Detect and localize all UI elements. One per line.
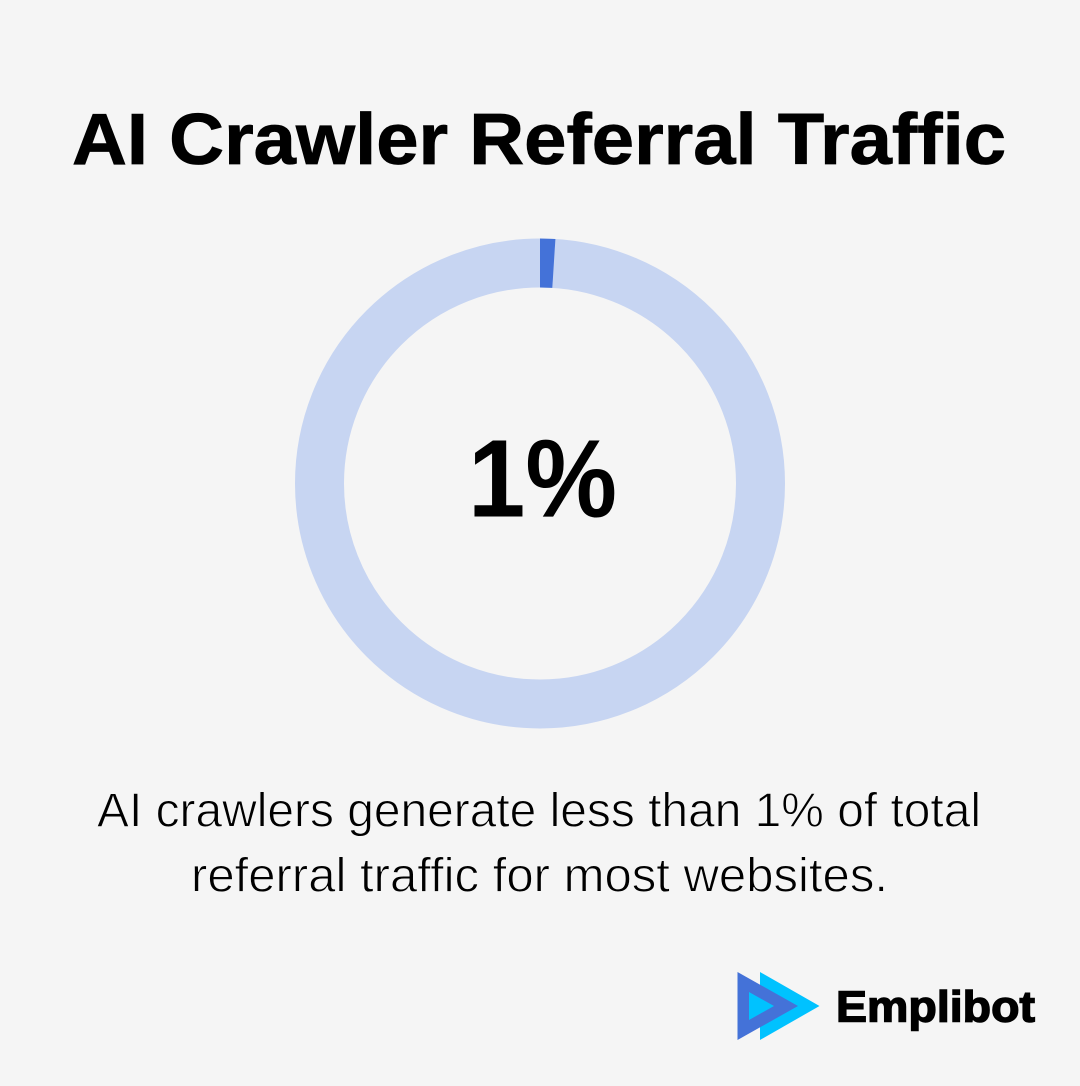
logo: Emplibot — [738, 972, 1035, 1040]
title: AI Crawler Referral Traffic — [72, 100, 1006, 180]
donut chart — [320, 238, 760, 704]
description text — [97, 784, 981, 902]
donut segment: 1% — [540, 238, 555, 288]
wordmark: Emplibot — [836, 983, 1035, 1032]
icon: play triangles — [738, 972, 820, 1040]
center value: 1% — [468, 418, 617, 541]
description text: referral traffic for most websites. — [191, 850, 888, 902]
donut remainder: 99% — [320, 263, 760, 704]
description text: AI crawlers generate less than 1% of total — [97, 784, 981, 838]
